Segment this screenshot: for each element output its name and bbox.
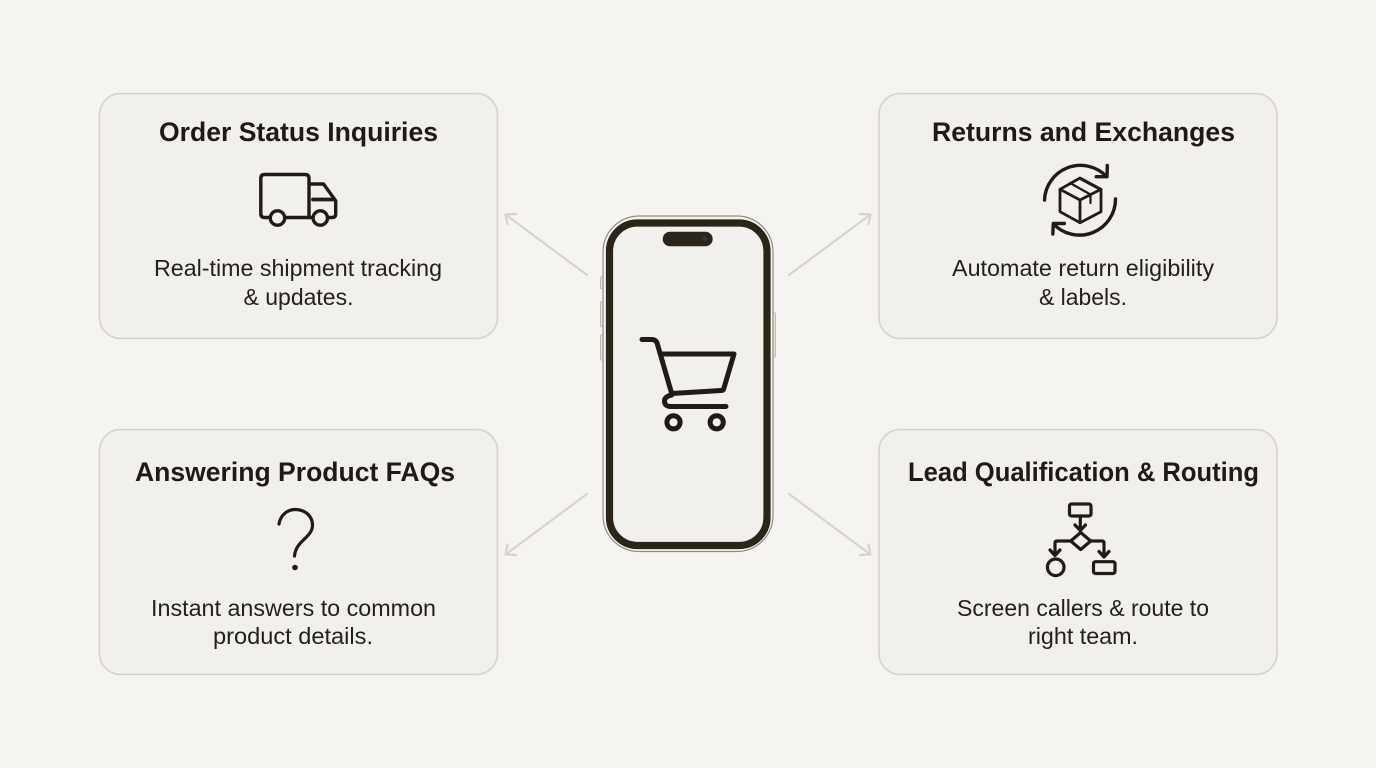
text: order status description: Real-time shipment tracking [154,255,442,281]
arrow: phone to returns [789,214,870,275]
icon: shopping cart [642,340,734,429]
phone camera island [663,232,713,246]
heading: lead qualification and routing: Lead Qualification & Routing [908,457,1259,487]
heading: answering product faqs: Answering Product FAQs [135,457,455,487]
panel: lead qualification and routing [879,430,1277,674]
text: returns description: Automate return eligibility [952,255,1215,281]
text: returns description: & labels. [1039,284,1127,310]
icon: delivery truck [261,174,336,225]
panel: order status inquiries [100,94,498,338]
arrow: phone to faqs [506,494,587,555]
arrow: phone to lead routing [789,494,870,555]
panel: answering product faqs [100,430,498,674]
icon: question mark [279,510,312,570]
arrow: phone to order status [506,214,587,275]
text: routing description: right team. [1028,623,1138,649]
icon: box with return arrows [1044,165,1116,235]
panel: returns and exchanges [879,94,1277,338]
heading: order status inquiries: Order Status Inquiries [159,117,438,147]
text: routing description: Screen callers & route to [957,595,1209,621]
text: faqs description: product details. [213,623,373,649]
phone illustration [600,216,776,552]
heading: returns and exchanges: Returns and Exchanges [932,117,1235,147]
icon: routing flowchart [1047,504,1115,576]
text: faqs description: Instant answers to common [151,595,436,621]
text: order status description: & updates. [244,284,354,310]
